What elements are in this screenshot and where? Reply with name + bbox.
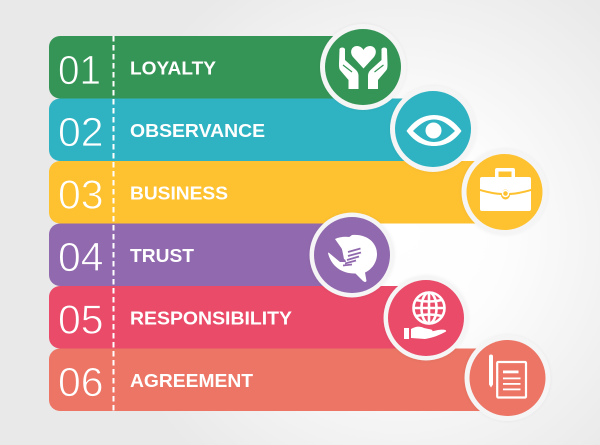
number 02: 02 [58, 109, 104, 155]
label observance: OBSERVANCE [130, 120, 265, 141]
label agreement: AGREEMENT [130, 370, 254, 391]
dashed divider [112, 36, 114, 411]
globe [414, 292, 444, 324]
number 04: 04 [58, 234, 104, 280]
number 05: 05 [58, 296, 104, 342]
heart [351, 46, 376, 68]
panel: 01 loyalty [49, 36, 363, 98]
document [497, 362, 526, 398]
panel: 02 observance [49, 98, 433, 161]
panel: 04 trust [49, 224, 349, 286]
left hand [339, 48, 358, 89]
right hand [368, 48, 388, 89]
pen [489, 354, 493, 388]
icon: observance eye [390, 86, 476, 172]
icon: trust speech bubble with hand [310, 212, 394, 298]
label business: BUSINESS [130, 182, 228, 204]
label trust: TRUST [130, 245, 195, 266]
panel: 05 responsibility [49, 286, 429, 348]
panel: 03 business [49, 161, 505, 224]
icon: loyalty hands and heart [320, 24, 406, 110]
fingers [343, 248, 361, 266]
label responsibility: RESPONSIBILITY [130, 308, 293, 328]
panel: 06 agreement [49, 348, 509, 411]
icon: responsibility globe in hand [384, 276, 468, 360]
icon: agreement document and pen [464, 335, 550, 421]
bubble [328, 235, 377, 282]
gap around hand [325, 240, 346, 262]
label loyalty: LOYALTY [130, 58, 217, 78]
icon: business briefcase [462, 149, 548, 235]
number 03: 03 [58, 172, 104, 218]
number 06: 06 [58, 359, 104, 405]
hand [404, 328, 409, 339]
number 01: 01 [58, 47, 101, 93]
hand [335, 237, 361, 263]
